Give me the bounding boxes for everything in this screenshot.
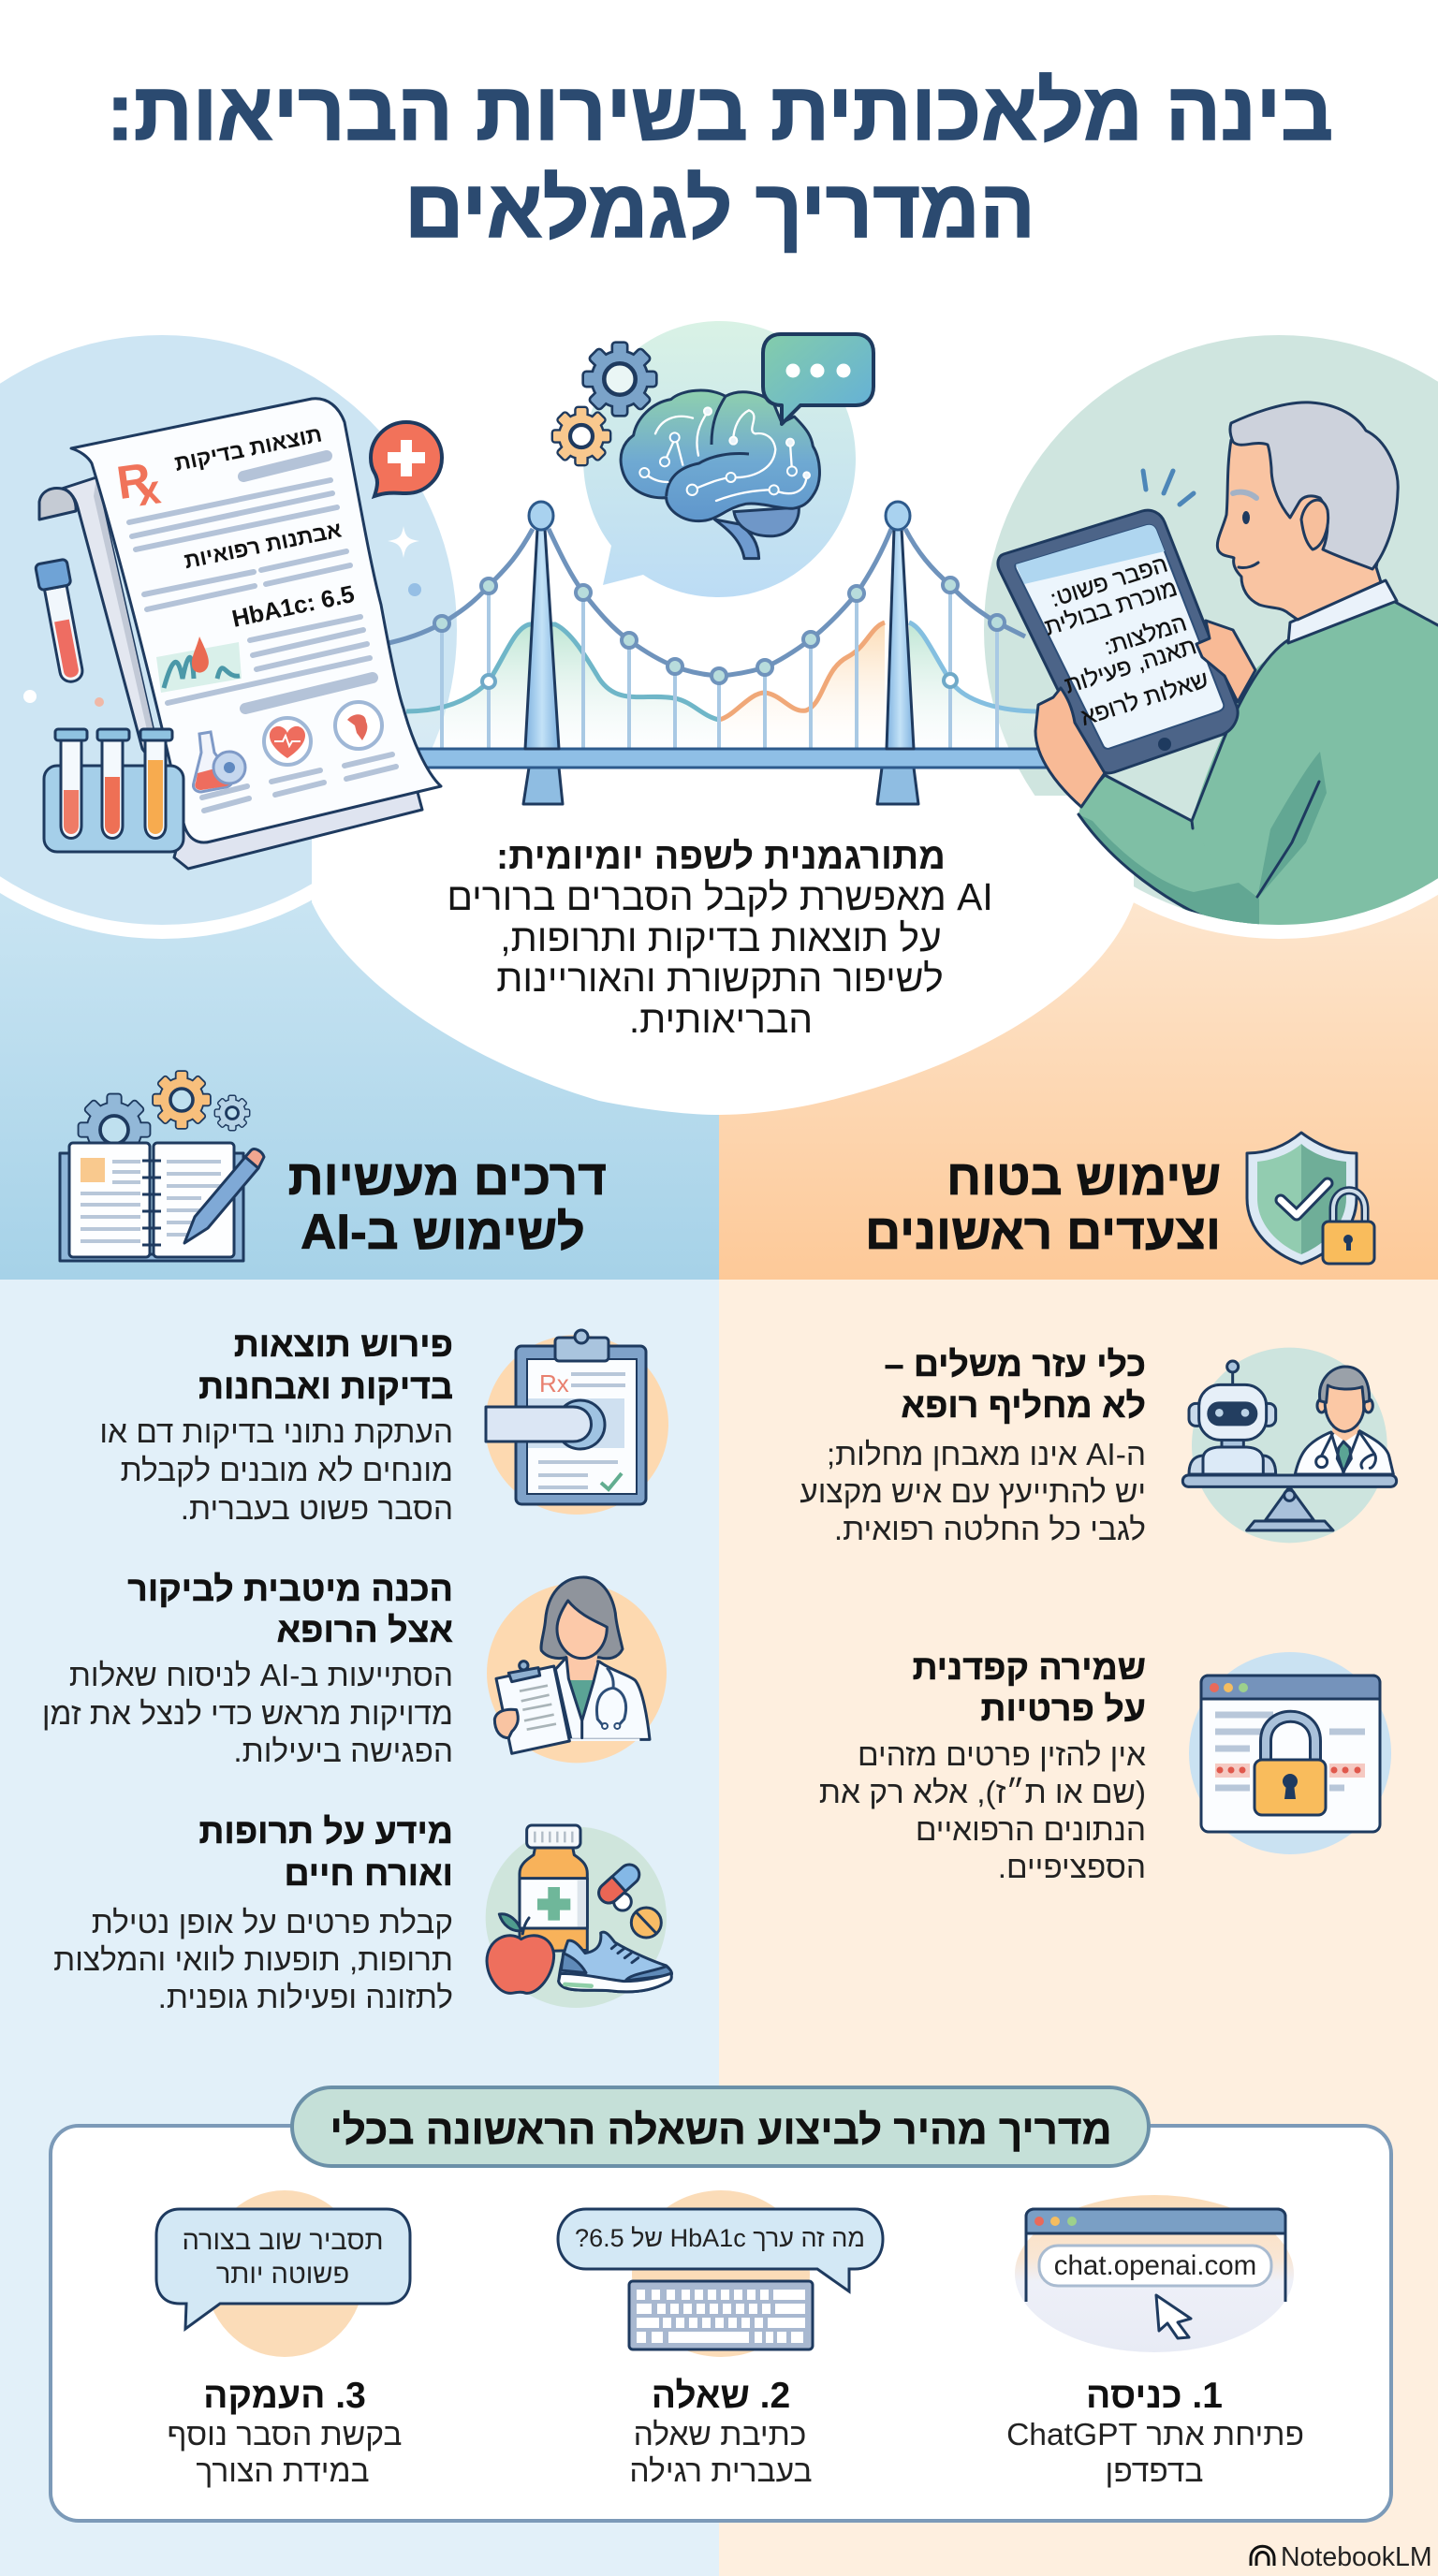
beam [1182,1475,1397,1486]
hair [541,1577,623,1659]
icon: keyboard with question bubble: מה זה ערך HbA1c של 6.5? [575,2224,865,2252]
neck and shirt [566,1655,597,1680]
icon: browser address bar [1015,2195,1294,2352]
shoe [559,1932,671,1992]
text: אצל הרופא [276,1610,453,1649]
item: complementary aid, not a doctor [800,1344,1397,1547]
hand [494,1709,518,1738]
backdrop [487,1583,667,1763]
title: בינה מלאכותית בשירות הבריאות: [107,66,1333,157]
icon: browser address bar: chat.openai.com [1054,2250,1256,2281]
tablet screen text [1042,551,1211,731]
step text: כתיבת שאלה [634,2418,806,2452]
icon: medicine, apple, shoe [486,1825,672,2008]
text: קבלת פרטים על אופן נטילת [92,1906,453,1940]
chart curve: orange [719,622,885,749]
eye and brow [1233,492,1258,568]
header: practical ways [60,1072,607,1261]
text: תרופות, תופעות לוואי והמלצות [53,1943,453,1978]
icon: heart with pulse [264,718,311,765]
text: הסתייעות ב-AI לניסוח שאלות [69,1659,453,1693]
guide title pill [292,2087,1149,2166]
medical illustration: test tubes and document [23,399,442,869]
hand upper [1196,621,1255,702]
cable nodes [434,578,1005,688]
icon: orange gear [553,408,609,464]
collar [1288,580,1397,643]
tablet screen text: שאלות לרופא [1078,666,1211,731]
right hero circle [970,321,1438,939]
text: לגבי כל החלטה רפואית. [834,1513,1146,1547]
central explanation text: על תוצאות בדיקות ותרופות, [500,916,942,959]
document sheet [71,399,441,842]
backdrop [1192,1348,1387,1543]
heading: לשימוש ב-AI [301,1205,585,1260]
text: יש להתייעץ עם איש מקצוע [800,1475,1146,1510]
icon: keyboard with question bubble [558,2190,883,2357]
folds [667,396,749,496]
central explanation text: AI מאפשרת לקבל הסברים ברורים [447,875,993,918]
icon: mini chart with blood drop [156,637,242,693]
guide title pill: מדריך מהיר לביצוע השאלה הראשונה בכלי [330,2107,1112,2153]
icon: brain with circuits and gears [553,334,873,559]
step text: 3. העמקה [203,2376,366,2416]
human doctor [1295,1430,1393,1474]
sheet heading: test results: תוצאות בדיקות [172,421,324,476]
icon: blue gear [584,344,655,415]
item: medication and lifestyle [53,1811,672,2015]
step text: 2. שאלה [652,2376,790,2416]
tablet screen text: הפבר פשוט: [1048,551,1171,612]
step text [1006,2376,1304,2489]
step text: בעברית רגילה [629,2454,813,2489]
clipboard [496,1666,569,1753]
icon: browser window with lock [1189,1652,1391,1854]
icon: medical cross bubble [371,422,442,496]
stethoscope [596,1668,626,1725]
sheet value: HbA1c: HbA1c: 6.5 [229,581,357,633]
decorative dots and sparkle [23,526,421,707]
ear [1301,500,1328,549]
step text: במידת הצורך [196,2454,370,2489]
cerebellum [734,507,799,536]
sleeve shading [1081,816,1259,925]
text: על פרטיות [981,1689,1146,1728]
towers [525,502,914,749]
face [557,1601,607,1659]
icon: simplify speech bubble: פשוטה יותר [216,2260,349,2290]
text: פירוש תוצאות [234,1325,453,1364]
step text: פתיחת אתר ChatGPT [1006,2418,1304,2452]
step text: בדפדפן [1106,2454,1203,2489]
text: בדיקות ואבחנות [198,1367,453,1406]
text: הספציפיים. [998,1851,1146,1885]
text: הנתונים הרפואיים [916,1813,1146,1848]
suspension cables [384,529,1025,676]
apple [499,1914,521,1931]
step 2 [558,2190,883,2489]
header: safe use [865,1133,1374,1264]
hangers [442,585,997,749]
tablet screen text: המלצות: [1101,609,1190,660]
text: מידע על תרופות [198,1811,453,1851]
bridge illustration with data curves [384,502,1058,804]
NotebookLM watermark: NotebookLM [1281,2542,1432,2572]
step text [629,2376,813,2489]
sheet heading: diagnoses: אבתנות רפואיות [182,517,344,573]
hand lower [1035,688,1105,807]
backdrop [486,1827,667,2008]
heading: שימוש בטוח [946,1150,1221,1206]
central explanation text: לשיפור התקשורת והאוריינות [496,957,944,1000]
text: הכנה מיטבית לביקור [127,1569,453,1608]
title: המדריך לגמלאים [404,163,1035,255]
central explanation text: מתורגמנית לשפה יומיומית: [496,836,946,877]
icon: clipboard with finger: Rx [539,1369,569,1398]
icon: simplify speech bubble [156,2190,410,2357]
text [800,1344,1146,1547]
central explanation text [447,836,993,1041]
face and neck [1217,440,1382,620]
text [42,1569,453,1769]
icon: notebook with gears and pen [60,1072,264,1261]
paper curl [39,477,164,777]
tablet screen text: תאנה, פעילות [1062,633,1199,699]
back sheet [174,782,422,869]
brain speech bubble backdrop [583,321,856,597]
text [53,1811,453,2015]
text [99,1325,453,1527]
icon: robot and doctor on scale [1182,1348,1397,1543]
icon: doctor with clipboard [487,1577,667,1763]
robot [1228,1372,1237,1383]
text: (שם או ת״ז), אלא רק את [819,1776,1146,1810]
icon: single test tube [35,559,89,684]
icon: shield with lock [1247,1133,1374,1264]
item: interpreting results [99,1325,668,1527]
text: לתזונה ופעילות גופנית. [158,1981,453,2015]
tablet [998,510,1238,773]
tablet screen text: מוכרת בבולית [1042,575,1181,641]
text: הסבר פשוט בעברית. [181,1492,453,1527]
text: העתקת נתוני בדיקות דם או [99,1415,453,1450]
left hero circle [0,321,471,939]
text: מדויקות מראש כדי לנצל את זמן [42,1697,453,1732]
sweater body [1180,602,1438,936]
step text: 1. כניסה [1086,2376,1223,2416]
title [107,66,1333,255]
circuit traces [644,410,807,501]
icon: pen [184,1149,264,1243]
item: strict privacy [819,1647,1391,1885]
hair [1230,402,1398,569]
heading [865,1150,1221,1260]
man reading tablet [998,402,1438,936]
central explanation text: הבריאותית. [629,998,813,1041]
icon: simplify speech bubble: תסביר שוב בצורה [182,2226,384,2256]
card [51,2126,1391,2521]
step text: בקשת הסבר נוסף [168,2418,402,2452]
text: מונחים לא מובנים לקבלת [121,1454,453,1488]
heading: וצעדים ראשונים [865,1205,1221,1260]
pills [614,1893,631,1910]
icon: medical circle [335,702,382,749]
text: הפגישה ביעילות. [233,1734,453,1769]
text: לא מחליף רופא [901,1385,1146,1425]
text: ה-AI אינו מאבחן מחלות; [827,1438,1146,1472]
heading [288,1150,607,1260]
text placeholder lines [129,456,396,811]
step text [168,2376,402,2489]
step 1 [1006,2195,1304,2489]
attention lines [1143,471,1194,505]
coat [555,1658,650,1739]
lower piers [523,768,918,804]
Rx mark [113,451,164,518]
text: שמירה קפדנית [913,1647,1146,1687]
sweater fold [1257,752,1327,899]
text: אין להזין פרטים מזהים [858,1738,1146,1773]
background: split colour panels [0,796,1438,2576]
chart curve: teal [406,624,719,749]
central white drop shape [312,796,1134,1115]
deck [412,749,1058,768]
icon: chat bubble with dots [763,334,873,424]
icon: clipboard with finger [485,1330,668,1515]
chart curve: blue right [909,622,1039,749]
brain stem [714,520,759,559]
heading: דרכים מעשיות [288,1150,607,1206]
icon: flask [193,732,245,792]
item: preparing for doctor visit [42,1569,667,1769]
sweater outlines [1078,602,1438,920]
text: כלי עזר משלים – [885,1344,1146,1383]
stand [1266,1486,1313,1520]
bottle [520,1847,587,1952]
text: ואורח חיים [284,1853,453,1893]
Rx mark: R [113,453,154,509]
brain lobes [621,390,819,521]
icon: tube rack [44,729,183,852]
sweater sleeve [1078,775,1259,936]
panel: quick guide [51,2087,1391,2521]
Rx mark: x [134,466,164,515]
text [819,1647,1146,1885]
step 3 [156,2190,410,2489]
